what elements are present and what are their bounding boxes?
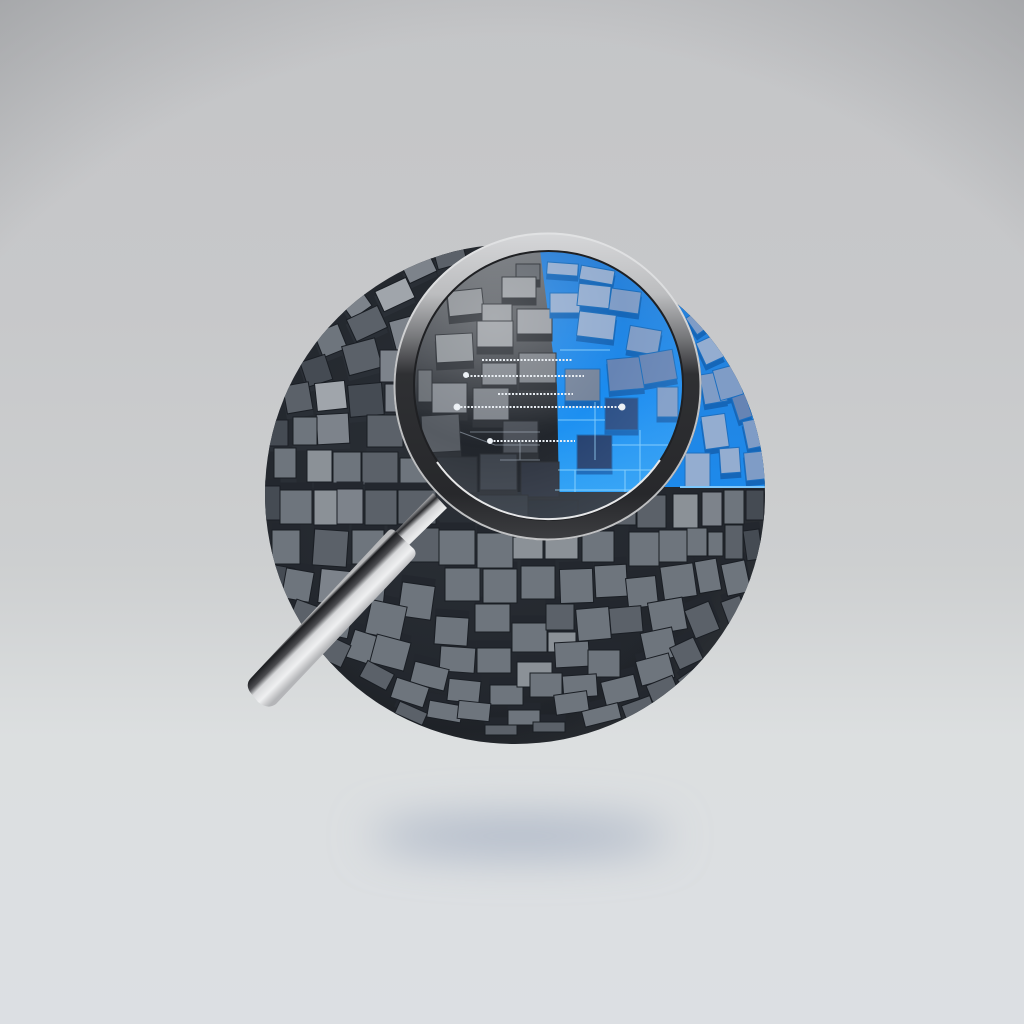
ring lower highlight <box>437 460 660 519</box>
magnifying glass handle <box>248 493 447 707</box>
magnifying glass ring <box>394 233 702 541</box>
upper grey cube tiles <box>268 248 467 488</box>
grey tiles in lens <box>418 264 560 516</box>
floor shadow <box>370 818 670 854</box>
blue upper-right hemisphere <box>664 304 765 488</box>
ring inner rim <box>414 251 683 520</box>
blue glowing side <box>540 250 690 497</box>
lower grey cube tiles <box>264 486 764 735</box>
dark cube side <box>415 252 558 492</box>
lens view <box>415 252 682 518</box>
handle grip <box>248 529 416 707</box>
handle neck <box>395 493 447 547</box>
ring outer rim <box>394 234 700 540</box>
sphere of cubes <box>264 244 766 744</box>
circuit grid lines <box>460 350 680 492</box>
glass sheen <box>414 252 682 520</box>
blue rim edge highlight <box>680 486 766 488</box>
blue tiles in lens <box>547 262 678 469</box>
data lines in lens <box>454 360 625 444</box>
